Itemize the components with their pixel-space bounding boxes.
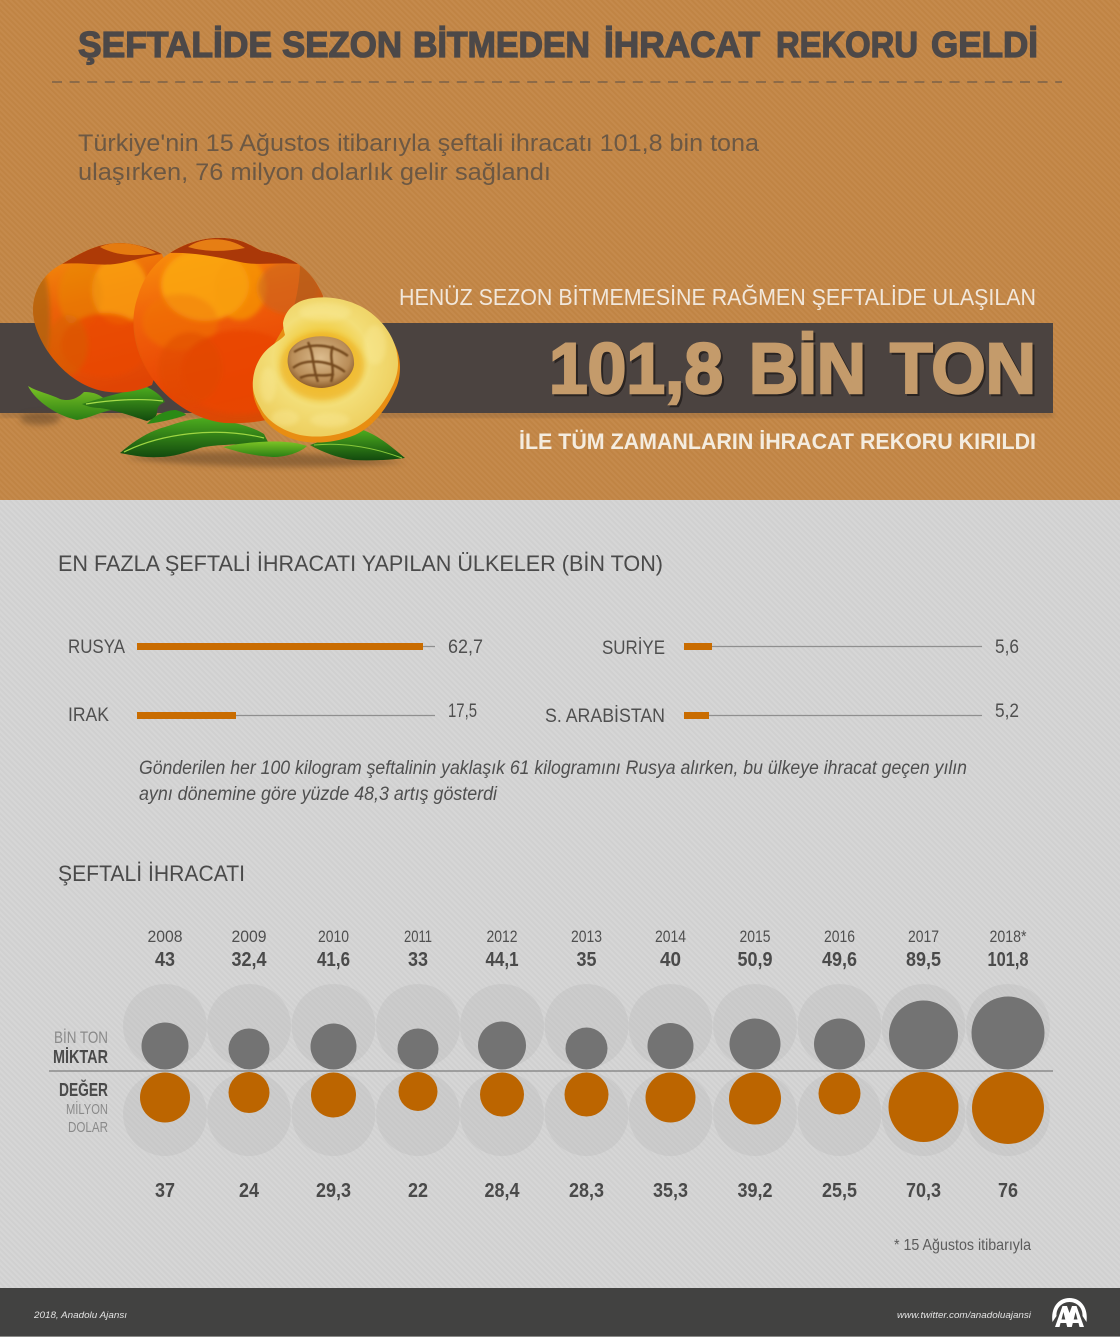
bubble chart backdrop circles [123, 984, 1050, 1156]
leaves shadow [20, 413, 405, 467]
year labels: 2015 [740, 927, 770, 946]
title: İHRACAT [604, 24, 760, 65]
export volume values: 89,5 [906, 949, 941, 971]
leaves [28, 386, 405, 460]
note: Russia share [139, 758, 967, 805]
export revenue values: 29,3 [316, 1180, 351, 1202]
bar: Rusya [68, 637, 483, 658]
bar: Suudi Arabistan: S. ARABİSTAN [545, 706, 665, 727]
bar: Suudi Arabistan [545, 701, 1019, 727]
subtitle [78, 130, 760, 186]
record number: BİN [751, 332, 868, 411]
export volume values [155, 949, 1028, 971]
export revenue values: 39,2 [738, 1180, 772, 1202]
record number: 101,8 [549, 330, 723, 409]
bar: Suriye: 5,6 [995, 637, 1019, 658]
export revenue values: 28,3 [569, 1180, 604, 1202]
peach stone [288, 336, 354, 388]
dark band shadow [0, 412, 1053, 417]
footnote: * 15 Ağustos itibarıyla [894, 1237, 1031, 1254]
note: Russia share: Gönderilen her 100 kilogram şeftalinin yaklaşık 61 kilogramını Rusya alırken, bu ülkeye ihracat geçen yılın [139, 758, 967, 779]
footer bar [0, 1288, 1120, 1337]
year labels: 2009 [232, 927, 266, 946]
title: BİTMEDEN [413, 24, 590, 65]
bar: Rusya: RUSYA [68, 637, 125, 658]
year labels: 2013 [571, 927, 602, 946]
bar: Irak: 17,5 [448, 701, 477, 722]
subtitle: Türkiye'nin 15 Ağustos itibarıyla şeftali ihracatı 101,8 bin tona [78, 130, 760, 157]
export volume values: 41,6 [317, 949, 350, 971]
title: GELDİ [931, 24, 1038, 65]
left peach [33, 243, 164, 392]
year labels: 2014 [655, 927, 686, 946]
record number: 101,8 [551, 332, 725, 411]
subtitle: ulaşırken, 76 milyon dolarlık gelir sağlandı [78, 159, 551, 186]
export revenue values: 35,3 [653, 1180, 688, 1202]
lower section background [0, 500, 1120, 1288]
row labels: DEĞER [59, 1079, 108, 1100]
export revenue values: 28,4 [484, 1180, 520, 1202]
year labels: 2011 [404, 927, 432, 946]
export revenue values: 37 [155, 1180, 175, 1202]
record number: TON [892, 332, 1038, 411]
volume bubbles [142, 996, 1044, 1070]
year labels: 2008 [148, 927, 182, 946]
section heading: top export countries: EN FAZLA ŞEFTALİ İHRACATI YAPILAN ÜLKELER (BİN TON) [58, 551, 663, 576]
value bubbles [140, 1072, 1044, 1144]
bar: Irak: IRAK [68, 705, 109, 726]
export revenue values: 70,3 [906, 1180, 941, 1202]
title [78, 24, 1038, 65]
headline above band: HENÜZ SEZON BİTMEMESİNE RAĞMEN ŞEFTALİDE ULAŞILAN [399, 284, 1036, 310]
row labels [53, 1028, 108, 1136]
export volume values: 101,8 [988, 949, 1028, 971]
bar: Suriye: SURİYE [602, 638, 665, 659]
year labels: 2012 [486, 927, 518, 946]
record number: TON [890, 330, 1036, 409]
row labels: DOLAR [68, 1119, 108, 1136]
year labels: 2016 [824, 927, 855, 946]
bar: Irak [68, 701, 477, 726]
bar: Suriye [602, 637, 1019, 659]
top banner background [0, 0, 1120, 500]
year labels [148, 927, 1027, 946]
export volume values: 32,4 [232, 949, 267, 971]
year labels: 2010 [318, 927, 349, 946]
export revenue values: 24 [239, 1180, 260, 1202]
export revenue values [155, 1180, 1018, 1202]
export volume values: 49,6 [822, 949, 857, 971]
export revenue values: 25,5 [822, 1180, 857, 1202]
row labels: BİN TON [54, 1028, 108, 1047]
note: Russia share: aynı dönemine göre yüzde 48,3 artış gösterdi [139, 784, 498, 805]
export revenue values: 76 [998, 1180, 1018, 1202]
axis line [49, 1070, 1053, 1072]
export volume values: 35 [576, 949, 596, 971]
bar: Rusya: 62,7 [448, 637, 483, 658]
export volume values: 44,1 [486, 949, 518, 971]
dark record band [0, 323, 1053, 413]
export volume values: 40 [660, 949, 681, 971]
export volume values: 43 [155, 949, 175, 971]
title: SEZON [282, 24, 402, 65]
section heading: peach exports: ŞEFTALİ İHRACATI [58, 861, 245, 886]
year labels: 2018* [990, 927, 1027, 946]
footer link: www.twitter.com/anadoluajansi [897, 1310, 1032, 1321]
title: ŞEFTALİDE [78, 24, 272, 65]
halved peach [250, 293, 402, 443]
row labels: MİKTAR [53, 1047, 108, 1067]
footer credit: 2018, Anadolu Ajansı [33, 1310, 127, 1321]
headline below band: İLE TÜM ZAMANLARIN İHRACAT REKORU KIRILDI [519, 429, 1036, 454]
illustration: peaches and leaves [20, 232, 405, 467]
export revenue values: 22 [408, 1180, 428, 1202]
bar chart: countries [68, 637, 1019, 727]
export volume values: 50,9 [738, 949, 772, 971]
row labels: MİLYON [66, 1100, 108, 1118]
title: REKORU [776, 24, 918, 65]
export volume values: 33 [408, 949, 428, 971]
icon: AA logo [1052, 1298, 1087, 1327]
year labels: 2017 [908, 927, 939, 946]
bar: Suudi Arabistan: 5,2 [995, 701, 1019, 722]
record number: BİN [749, 330, 866, 409]
record number [549, 330, 1038, 411]
right peach [134, 238, 323, 424]
